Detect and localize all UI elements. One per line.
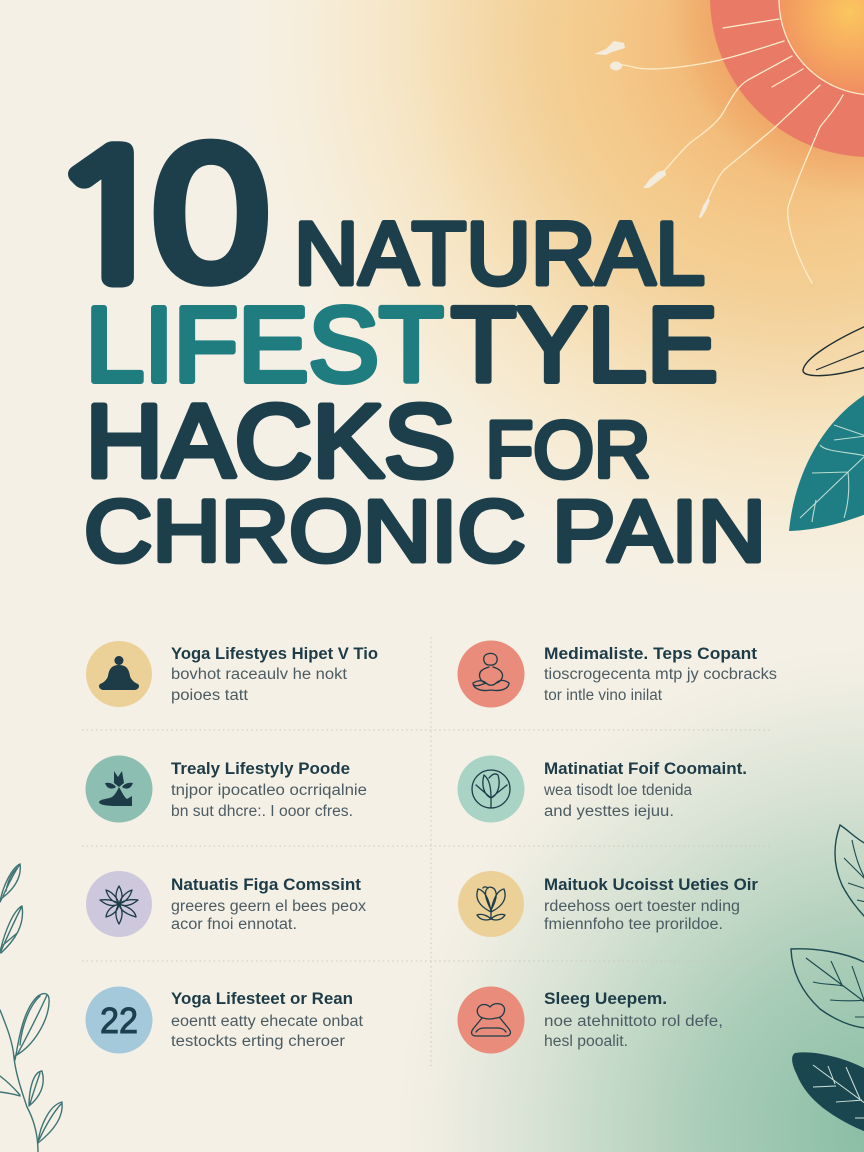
item: maituok: Maituok Ucoisst Ueties Oir (544, 876, 759, 894)
icon: leaf in circle (472, 770, 510, 808)
item: maituok (458, 871, 759, 937)
item: maituok: fmiennfoho tee prorildoe. (544, 916, 723, 933)
item: sleep (458, 986, 723, 1054)
icon: plant sprig left lower (0, 994, 62, 1152)
icon: pillow and bed (472, 1004, 510, 1036)
icon: outline meditator (473, 653, 509, 691)
item: sleep: noe atehnittoto rol defe, (544, 1013, 723, 1030)
title: TYLE (451, 286, 718, 404)
icon: leaves and foot (99, 771, 133, 806)
item: sleep: Sleeg Ueepem. (544, 990, 667, 1008)
title: LIFEST (86, 286, 444, 404)
icon: teal leaf right (789, 394, 864, 531)
icon: outline leaf top right (803, 326, 864, 376)
item: yoga lifestyles: poioes tatt (171, 687, 249, 704)
icon: number 22: 22 (100, 1000, 138, 1041)
item: matinatiat (458, 756, 747, 822)
icon: outline leaf bottom right 2 (791, 949, 864, 1028)
item: treely lifestyle (86, 756, 367, 822)
icon: dark leaf bottom right (792, 1052, 864, 1132)
item: medimaliste (458, 640, 777, 708)
item: yoga lifesteet: testockts erting cheroer (171, 1033, 345, 1050)
item: natural yoga: Natuatis Figa Comssint (171, 876, 362, 894)
item: treely lifestyle: bn sut dhcre:. I ooor cfres. (171, 803, 353, 820)
item: matinatiat: wea tisodt loe tdenida (543, 782, 692, 799)
title: 0 (150, 128, 271, 304)
item: yoga lifesteet: Yoga Lifesteet or Rean (171, 990, 353, 1008)
item: yoga lifesteet (86, 986, 364, 1054)
item: yoga lifestyles: bovhot raceaulv he nokt (171, 666, 348, 683)
item: sleep: hesl pooalit. (544, 1033, 628, 1050)
item: natural yoga: acor fnoi ennotat. (171, 916, 297, 933)
item: yoga lifestyles: Yoga Lifestyes Hipet V Tio (171, 645, 378, 663)
icon: lotus flower (477, 887, 505, 920)
item: medimaliste: Medimaliste. Teps Copant (544, 645, 758, 663)
item: natural yoga (86, 871, 366, 937)
icon: meditating figure (99, 656, 139, 690)
title: FOR (486, 405, 650, 494)
item: matinatiat: Matinatiat Foif Coomaint. (544, 760, 747, 778)
icon: plant sprig left upper (0, 864, 23, 953)
item: treely lifestyle: tnjpor ipocatleo ocrriqalnie (171, 782, 367, 799)
item: maituok: rdeehoss oert toester nding (544, 898, 740, 915)
icon: sun with rays (594, 0, 864, 283)
title: CHRONIC PAIN (84, 483, 766, 580)
item: medimaliste: tor intle vino inilat (544, 687, 663, 704)
item: medimaliste: tioscrogecenta mtp jy cocbracks (544, 666, 777, 683)
item: matinatiat: and yesttes iejuu. (544, 803, 674, 820)
title: 1 (47, 129, 175, 305)
item: treely lifestyle: Trealy Lifestyly Poode (171, 760, 350, 778)
dividers (82, 637, 772, 1068)
icon: star flower (100, 886, 138, 924)
title (47, 128, 766, 580)
title: HACKS (86, 384, 456, 498)
icon: outline leaf bottom right 1 (835, 825, 864, 918)
item: yoga lifesteet: eoentt eatty ehecate onbat (171, 1013, 364, 1030)
title: NATURAL (294, 203, 705, 303)
item: yoga lifestyles (86, 641, 378, 707)
item: natural yoga: greeres geern el bees peox (171, 898, 366, 915)
